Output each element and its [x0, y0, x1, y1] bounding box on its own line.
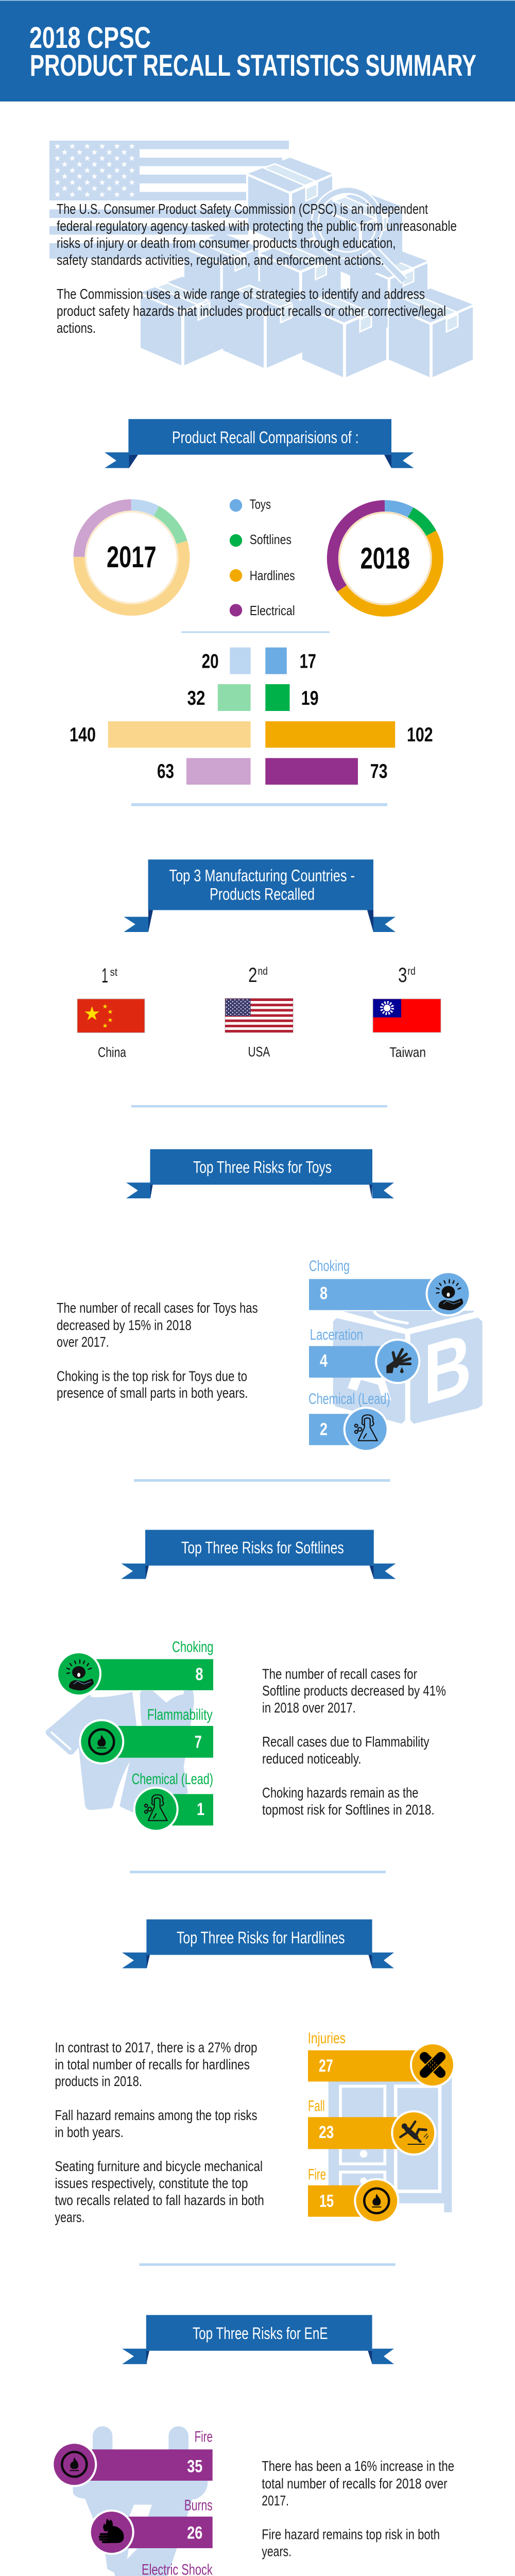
legend: Electrical [250, 603, 295, 618]
risk: burns: Burns [184, 2497, 213, 2514]
toys text [57, 1300, 258, 1401]
EnE text: 2017. [262, 2493, 289, 2509]
risk: choking: Choking [309, 1258, 350, 1275]
softlines text: Softline products decreased by 41% [262, 1683, 446, 1699]
softlines text: topmost risk for Softlines in 2018. [262, 1802, 435, 1818]
toys text: presence of small parts in both years. [57, 1385, 248, 1401]
country: Taiwan: 3 [398, 964, 407, 987]
country: USA [225, 964, 293, 1059]
legend: Hardlines [250, 568, 295, 583]
bar chart: 2017 vs 2018: 32 [187, 687, 205, 709]
risk: burns [89, 2497, 213, 2555]
risk: choking: 8 [196, 1665, 203, 1684]
flag: Taiwan [373, 999, 441, 1032]
banner: product recall comparisons: Product Recall Comparisions of : [172, 428, 358, 447]
hardlines text: two recalls related to fall hazards in both [55, 2192, 264, 2208]
donut chart 2017 [79, 505, 184, 610]
risk: laceration: 4 [320, 1351, 328, 1370]
banner: hardlines [122, 1920, 394, 1968]
risk: injuries: Injuries [308, 2030, 346, 2047]
EnE text: total number of recalls for 2018 over [262, 2476, 448, 2492]
banner: hardlines: Top Three Risks for Hardlines [177, 1928, 345, 1947]
illustration: toy block: A [346, 1326, 393, 1416]
country: China: 1 [101, 964, 108, 987]
bar chart: 2017 vs 2018: 73 [370, 760, 387, 783]
EnE text [262, 2458, 454, 2576]
risk: fire: 35 [187, 2456, 202, 2476]
banner: top 3 manufacturing countries: Top 3 Manufacturing Countries - [169, 867, 355, 885]
country: Taiwan: Taiwan [389, 1044, 426, 1060]
illustration: t-shirt [46, 1690, 194, 1814]
risk: fire [52, 2429, 213, 2487]
risk: burns: 26 [187, 2523, 202, 2543]
softlines risk bars [56, 1639, 213, 1832]
EnE text: Fire hazard remains top risk in both [262, 2526, 440, 2542]
background illustration: flag and boxes [49, 141, 473, 377]
intro text: actions. [57, 320, 96, 336]
illustration: toy block [333, 1311, 483, 1423]
flag: USA [225, 998, 293, 1032]
hardlines text: In contrast to 2017, there is a 27% drop [55, 2040, 258, 2056]
hardlines text: Seating furniture and bicycle mechanical [55, 2158, 263, 2174]
intro text: safety standards activities, regulation, and enforcement actions. [57, 252, 384, 268]
risk: flammability: 7 [195, 1733, 202, 1752]
risk: choking [56, 1639, 213, 1697]
bar chart: 2017 vs 2018: 17 [300, 650, 316, 672]
risk: choking: Choking [172, 1639, 213, 1656]
country: China [77, 964, 145, 1060]
banner: softlines: Top Three Risks for Softlines [181, 1538, 344, 1557]
legend [230, 497, 295, 618]
toys text: decreased by 15% in 2018 [57, 1317, 192, 1333]
hardlines text: in both years. [55, 2124, 124, 2140]
softlines text: in 2018 over 2017. [262, 1700, 356, 1716]
risk: choking [309, 1258, 471, 1316]
softlines text: Choking hazards remain as the [262, 1785, 418, 1801]
toys text: The number of recall cases for Toys has [57, 1300, 258, 1316]
banner: softlines [121, 1530, 396, 1579]
risk: choking: 8 [320, 1283, 328, 1303]
risk: fall: 23 [319, 2123, 334, 2142]
hardlines text: years. [55, 2209, 84, 2225]
header band [0, 0, 515, 101]
risk: chemical lead: Chemical (Lead) [132, 1771, 213, 1788]
risk: fall: Fall [308, 2097, 325, 2114]
risk: fire: Fire [308, 2166, 326, 2183]
risk: fire: 15 [319, 2191, 334, 2211]
risk: flammability [79, 1706, 213, 1765]
risk: chemical lead: Chemical (Lead) [308, 1391, 390, 1408]
banner: toys [126, 1149, 394, 1198]
banner: EnE [122, 2315, 394, 2364]
legend: Toys [250, 497, 271, 512]
country: USA: 2 [248, 964, 258, 987]
softlines text: The number of recall cases for [262, 1666, 417, 1682]
illustration: cabinet [329, 2073, 452, 2212]
risk: laceration: Laceration [310, 1327, 363, 1344]
intro text [57, 201, 457, 336]
bar chart: 2017 vs 2018: 102 [407, 724, 433, 746]
country: China: st [110, 967, 117, 978]
illustration: toy block: B [423, 1314, 472, 1423]
bar chart: 2017 vs 2018: 20 [202, 650, 219, 672]
risk: fire [308, 2166, 399, 2224]
country: Taiwan: rd [407, 965, 416, 977]
title [29, 21, 476, 82]
risk: chemical lead [132, 1771, 213, 1832]
donut chart 2017: 2017 [107, 540, 157, 574]
banner: product recall comparisons [105, 419, 414, 468]
softlines text: reduced noticeably. [262, 1751, 362, 1767]
country: USA: USA [248, 1044, 270, 1059]
country: Taiwan [373, 964, 441, 1060]
hardlines text: issues respectively, constitute the top [55, 2175, 248, 2191]
hardlines risk bars [308, 2030, 455, 2224]
country: China: China [98, 1044, 127, 1060]
risk: chemical lead: 2 [320, 1420, 328, 1439]
bar chart: 2017 vs 2018: 63 [157, 760, 174, 783]
softlines text [262, 1666, 446, 1818]
donut chart 2018 [333, 506, 438, 611]
title: 2018 CPSC [29, 21, 151, 55]
donut chart 2018: 2018 [360, 542, 410, 575]
EnE risk bars [52, 2429, 213, 2576]
flag: China [77, 999, 145, 1032]
risk: chemical lead [308, 1391, 390, 1452]
risk: fire: Fire [195, 2429, 213, 2445]
toys text: over 2017. [57, 1334, 109, 1350]
hardlines text: Fall hazard remains among the top risks [55, 2107, 258, 2123]
risk: injuries: 27 [319, 2056, 333, 2076]
bar chart: 2017 vs 2018: 140 [70, 724, 96, 746]
banner: top 3 manufacturing countries [124, 859, 396, 932]
bar chart: 2017 vs 2018 [70, 648, 433, 785]
legend: Softlines [250, 532, 291, 547]
banner: top 3 manufacturing countries: Products Recalled [210, 885, 315, 903]
toys text: Choking is the top risk for Toys due to [57, 1368, 247, 1384]
EnE text: There has been a 16% increase in the [262, 2458, 454, 2474]
risk: injuries [308, 2030, 455, 2088]
hardlines text: products in 2018. [55, 2073, 142, 2089]
hardlines text [55, 2040, 264, 2225]
toys risk bars [308, 1258, 471, 1452]
EnE text: years. [262, 2543, 291, 2559]
intro text: The Commission uses a wide range of strategies to identify and address [57, 286, 425, 302]
banner: EnE: Top Three Risks for EnE [193, 2324, 328, 2343]
softlines text: Recall cases due to Flammability [262, 1734, 430, 1750]
hardlines text: in total number of recalls for hardlines [55, 2056, 250, 2072]
risk: laceration [309, 1327, 420, 1384]
risk: fall [308, 2097, 436, 2156]
risk: flammability: Flammability [147, 1706, 213, 1723]
illustration: electric plug [73, 2426, 208, 2576]
country: USA: nd [258, 965, 268, 977]
bar chart: 2017 vs 2018: 19 [301, 687, 319, 709]
intro text: risks of injury or death from consumer products through education, [57, 235, 396, 251]
risk: chemical lead: 1 [197, 1800, 204, 1819]
banner: toys: Top Three Risks for Toys [193, 1158, 332, 1177]
